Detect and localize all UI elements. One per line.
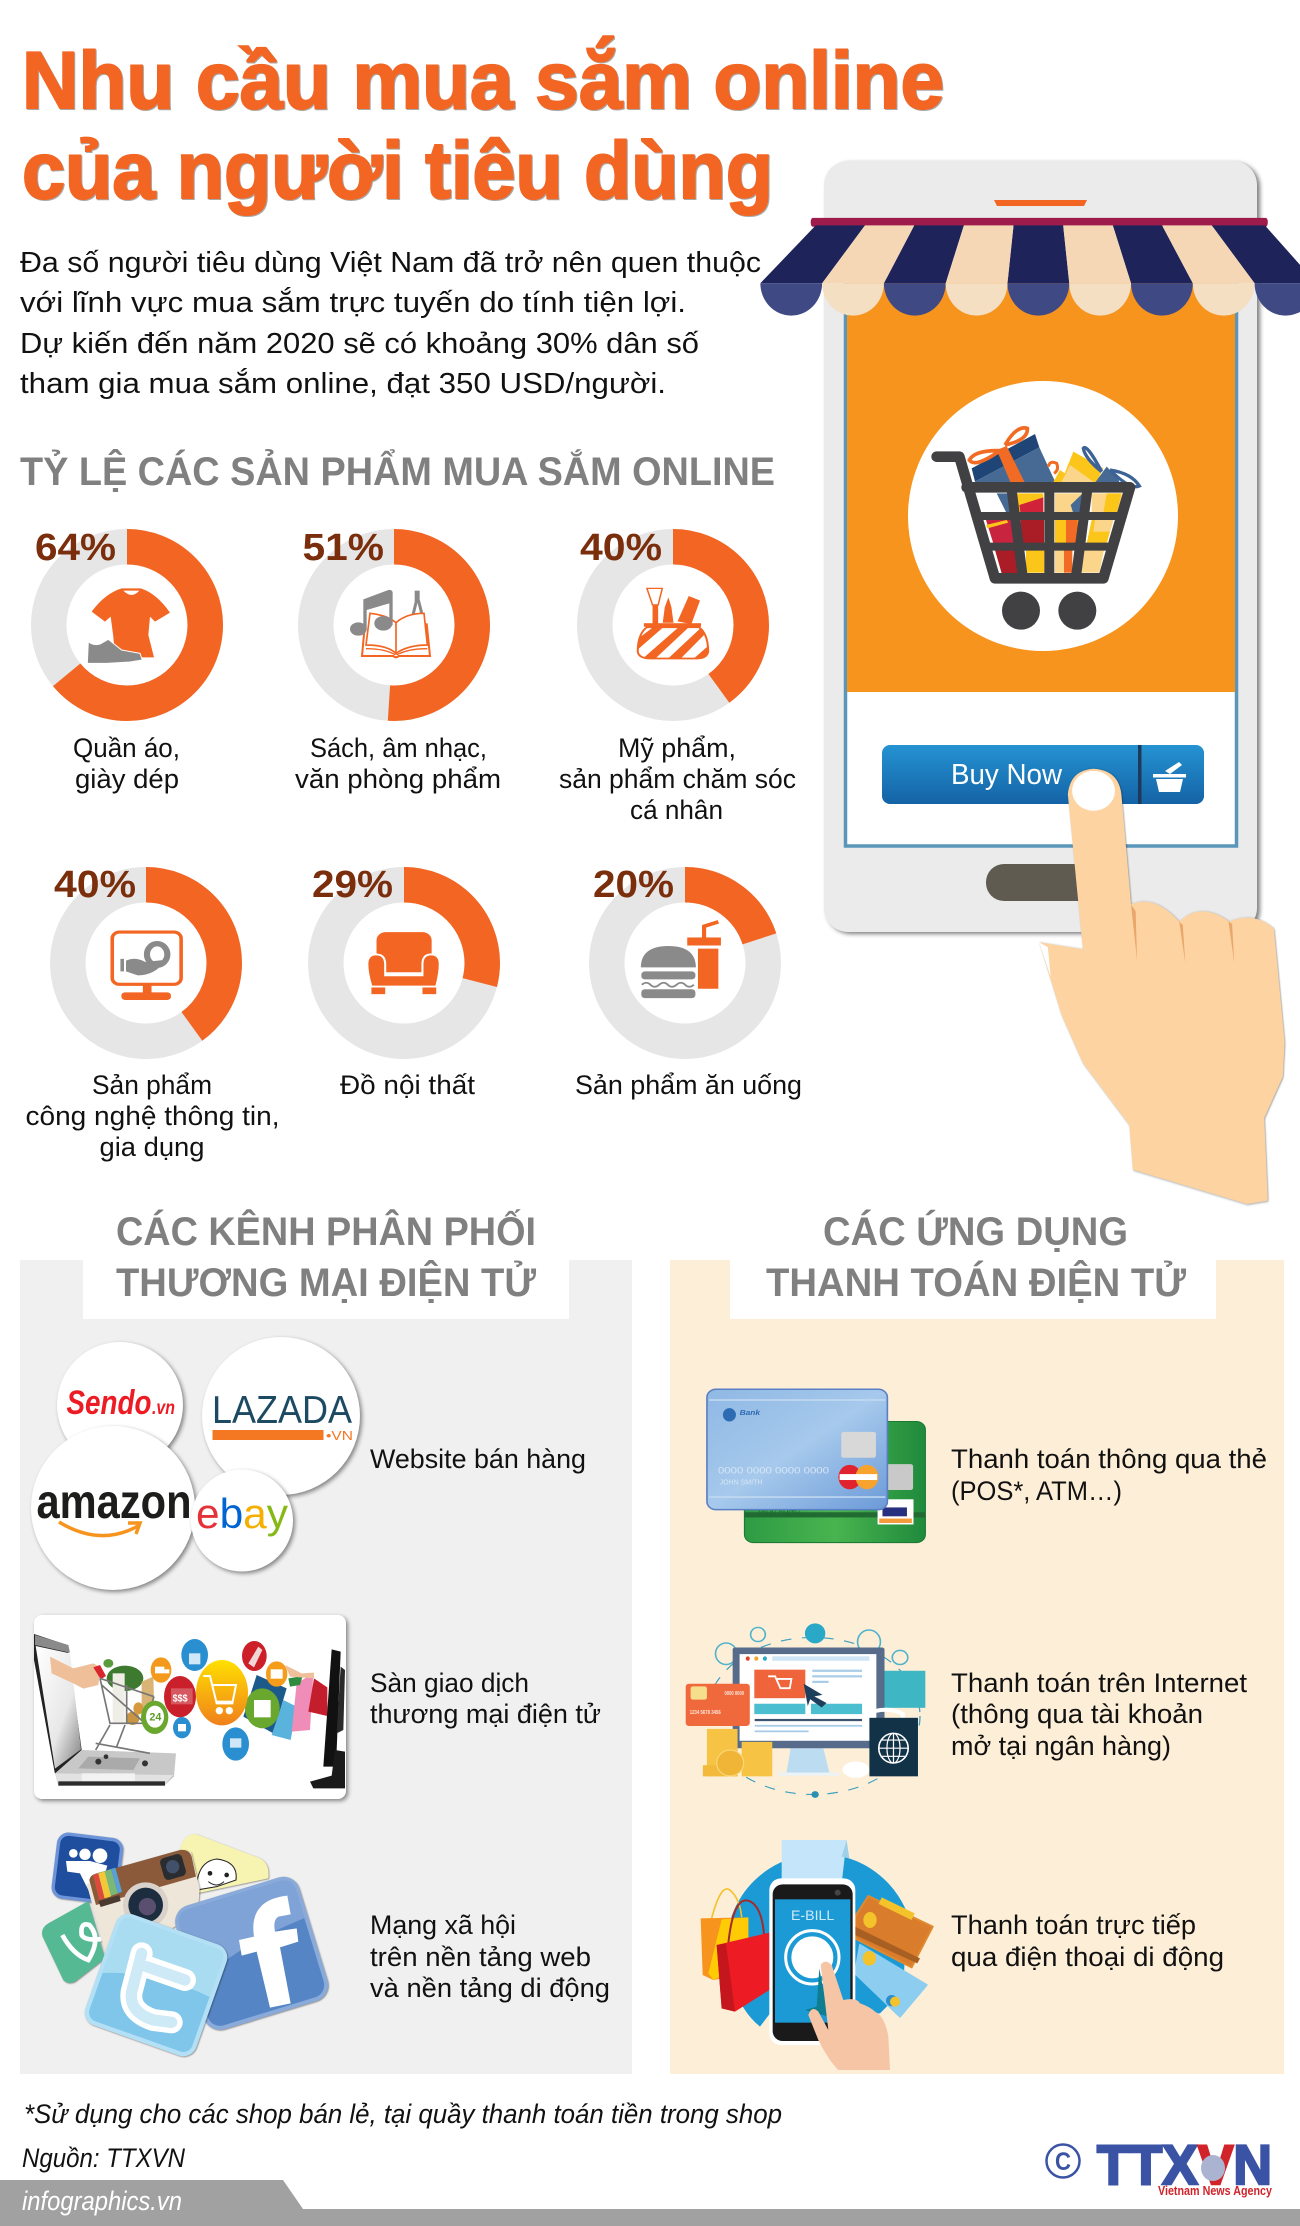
donut: furniture 29%: [312, 864, 482, 1100]
icon: bank cards: JOHN SMITH: [757, 1509, 800, 1519]
heading: distribution channels: CÁC KÊNH PHÂN PHỐI: [116, 1208, 536, 1254]
label: cosmetics: [559, 733, 796, 825]
phone body: [824, 161, 1257, 932]
title: Nhu cầu mua sắm online: [22, 35, 944, 126]
value 20%: 20%: [593, 864, 674, 906]
facebook: [173, 1875, 330, 2032]
heading: payment apps: [766, 1208, 1187, 1305]
intro paragraph: [20, 247, 761, 400]
logo: Amazon: amazon: [36, 1476, 192, 1529]
label: card payment: (POS*, ATM…): [951, 1476, 1122, 1506]
finger: [808, 1962, 890, 2070]
intro paragraph: Đa số người tiêu dùng Việt Nam đã trở nên quen thuộc: [20, 247, 761, 279]
donut: cosmetics 40%: [559, 527, 796, 825]
label: clothing: giày dép: [75, 764, 179, 794]
label: social: và nền tảng di động: [370, 1973, 610, 2003]
footnote: *Sử dụng cho các shop bán lẻ, tại quầy thanh toán tiền trong shop: [24, 2099, 782, 2129]
phone: [769, 1878, 855, 2045]
icon: music and book: [350, 590, 430, 657]
label: clothing: Quần áo,: [73, 733, 180, 763]
footer bar: [0, 2180, 1300, 2226]
logo: Sendo: Sendo: [66, 1384, 152, 1422]
value 40%: 40%: [54, 864, 136, 906]
icons: social networks: [42, 1833, 330, 2057]
logo: TTXVN: TTXVN: [1097, 2133, 1272, 2196]
label: clothing: [73, 733, 180, 794]
icon: burger and drink: [640, 922, 721, 999]
donut: food 20%: [575, 864, 802, 1100]
waze: [180, 1834, 269, 1893]
label: IT products: Sản phẩm: [92, 1070, 212, 1100]
shopping cart: [107, 1666, 143, 1691]
bags: [712, 1889, 742, 1918]
myspace: [52, 1833, 123, 1904]
intro paragraph: Dự kiến đến năm 2020 sẽ có khoảng 30% dân số: [20, 328, 699, 360]
value 29%: 29%: [312, 864, 393, 906]
buy now button: [882, 745, 1204, 804]
label: mobile payment: qua điện thoại di động: [951, 1942, 1224, 1972]
label: books: văn phòng phẩm: [295, 764, 501, 794]
donut: books 51%: [295, 527, 501, 794]
heading: distribution channels: THƯƠNG MẠI ĐIỆN TỬ: [116, 1259, 537, 1305]
hand pressing button: [1039, 769, 1285, 1204]
icon: bank cards: 0000 0000 0000 0000: [718, 1466, 829, 1475]
right arm: [308, 1678, 327, 1716]
label: internet payment: (thông qua tài khoản: [951, 1699, 1203, 1729]
label: mobile payment: [951, 1910, 1224, 1972]
label: marketplaces: thương mại điện tử: [370, 1699, 601, 1729]
monitor: [323, 1649, 341, 1767]
label: IT products: [26, 1070, 280, 1162]
intro paragraph: tham gia mua sắm online, đạt 350 USD/người.: [20, 368, 666, 400]
label: furniture: Đồ nội thất: [340, 1070, 476, 1100]
gift boxes: [972, 434, 1039, 482]
icon: mobile e-bill: [701, 1840, 933, 2070]
arm: [50, 1657, 101, 1689]
label: cosmetics: Mỹ phẩm,: [618, 733, 736, 763]
logo: Sendo: [57, 1342, 183, 1468]
label: cosmetics: sản phẩm chăm sóc: [559, 764, 796, 794]
footer bar: infographics.vn: [22, 2186, 182, 2216]
panel: payment apps: [670, 1208, 1284, 2074]
icon: internet payment: [686, 1623, 925, 1798]
cards: [855, 1896, 933, 1967]
label: social: [370, 1910, 610, 2003]
panel: distribution channels: [20, 1208, 632, 2074]
image: marketplace card: 24: [149, 1712, 162, 1724]
instagram: [88, 1850, 198, 1965]
bubbles: [181, 1639, 208, 1671]
twitter: [84, 1913, 228, 2057]
heading: payment apps: CÁC ỨNG DỤNG: [823, 1208, 1128, 1254]
image: marketplace card: [34, 1615, 346, 1799]
donut: clothing 64%: [35, 527, 205, 794]
donut: IT products 40%: [26, 864, 280, 1162]
vine: [42, 1901, 105, 1983]
label: IT products: công nghệ thông tin,: [26, 1101, 280, 1131]
icon: bank cards: JOHN SMITH: [720, 1478, 762, 1486]
label: internet payment: mở tại ngân hàng): [951, 1731, 1171, 1761]
label: marketplaces: [370, 1668, 601, 1729]
phone illustration: [760, 161, 1300, 1204]
logo: TTXVN: Vietnam News Agency: [1158, 2184, 1272, 2198]
icon: internet payment: 0000 0000: [724, 1691, 744, 1697]
logo: eBay: [191, 1470, 293, 1572]
label: cosmetics: cá nhân: [630, 795, 723, 825]
laptop: [34, 1634, 82, 1774]
buy now button: Buy Now: [951, 759, 1063, 791]
image: marketplace card: $$$: [173, 1693, 188, 1704]
icon: armchair: [367, 932, 440, 994]
logo: Sendo: .vn: [152, 1398, 175, 1419]
awning: [760, 218, 1300, 316]
home button: [986, 864, 1096, 901]
logo: eBay: ebay: [196, 1490, 288, 1537]
logo: Lazada: [202, 1337, 360, 1495]
phone speaker: [994, 200, 1087, 206]
heading: payment apps: THANH TOÁN ĐIỆN TỬ: [766, 1259, 1187, 1305]
label: books: Sách, âm nhạc,: [310, 733, 487, 763]
icon: bank cards: [707, 1389, 925, 1543]
label: internet payment: [951, 1668, 1248, 1761]
value 51%: 51%: [302, 527, 384, 569]
label: mobile payment: Thanh toán trực tiếp: [951, 1910, 1196, 1940]
icon: basket: [1153, 762, 1186, 792]
cart circle: [908, 381, 1178, 651]
value 64%: 64%: [35, 527, 116, 569]
icon: bank cards: Bank: [740, 1408, 761, 1417]
label: IT products: gia dụng: [100, 1132, 204, 1162]
icon: cosmetics bag: [633, 588, 712, 661]
icon: computer with gear: [112, 932, 181, 1000]
label: food: Sản phẩm ăn uống: [575, 1070, 802, 1100]
label: books: [295, 733, 501, 794]
phone screen: [846, 280, 1236, 846]
cart frame: [937, 457, 1130, 578]
label: card payment: [951, 1444, 1267, 1506]
title: của người tiêu dùng: [22, 126, 773, 216]
intro paragraph: với lĩnh vực mua sắm trực tuyến do tính tiện lợi.: [20, 287, 686, 319]
value 40%: 40%: [580, 527, 662, 569]
logo: Amazon: [31, 1426, 195, 1590]
label: social: trên nền tảng web: [370, 1942, 591, 1972]
icon: mobile e-bill: E-BILL: [791, 1907, 835, 1923]
logo: TTXVN: C: [1055, 2148, 1071, 2176]
section heading: product share: TỶ LỆ CÁC SẢN PHẨM MUA SẮM ONLINE: [20, 447, 775, 494]
shopping cart: [937, 428, 1139, 630]
icon: shirt and shoe: [87, 588, 170, 663]
label: card payment: Thanh toán thông qua thẻ: [951, 1444, 1267, 1474]
label: internet payment: Thanh toán trên Internet: [951, 1668, 1248, 1698]
goods behind grid: [997, 493, 1015, 513]
source: Nguồn: TTXVN: [22, 2143, 185, 2173]
label: websites: Website bán hàng: [370, 1444, 586, 1474]
label: social: Mạng xã hội: [370, 1910, 516, 1940]
logo: Lazada: •VN: [326, 1428, 353, 1443]
logo: Lazada: LAZADA: [212, 1389, 352, 1432]
heading: distribution channels: [116, 1208, 537, 1305]
label: marketplaces: Sàn giao dịch: [370, 1668, 529, 1698]
icon: internet payment: 1234 5678 3456: [690, 1710, 721, 1716]
bags: [243, 1675, 287, 1733]
title: [22, 35, 944, 216]
